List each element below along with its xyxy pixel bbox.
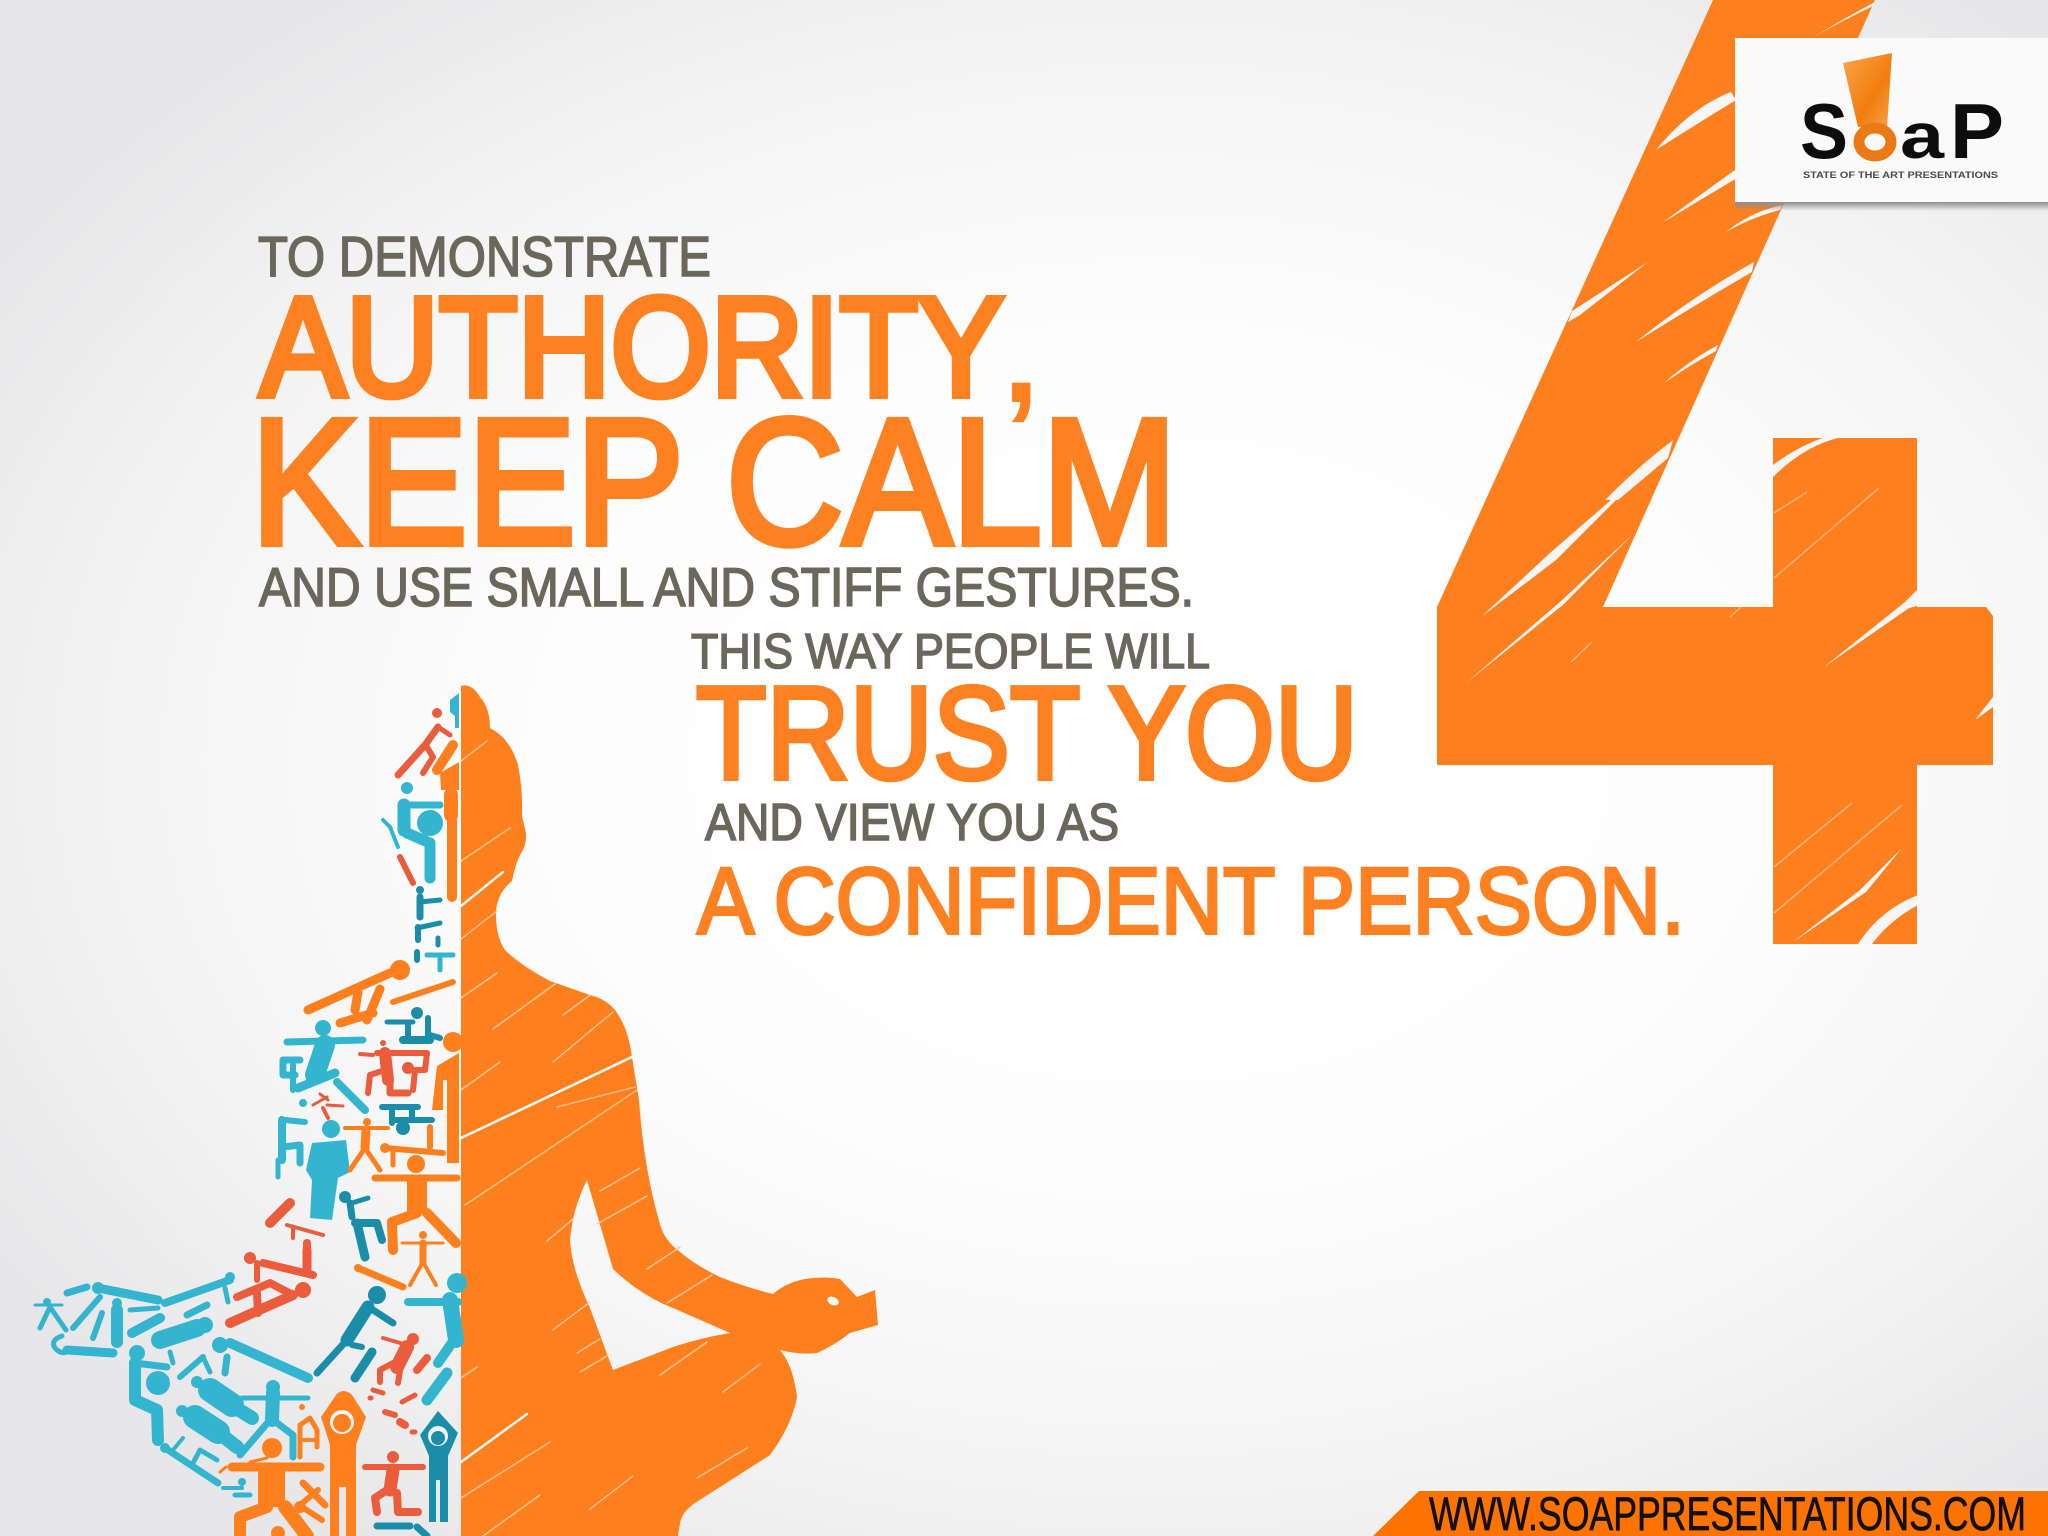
- text block: trust you: AND VIEW YOU AS: [705, 793, 1119, 851]
- red pictograms: [230, 708, 450, 1512]
- logo card: [1735, 38, 2048, 211]
- meditating figure: orange right half: [461, 685, 878, 1536]
- big numeral 4: [1437, 0, 1993, 944]
- heading text block: authority: [251, 225, 1194, 618]
- text block: trust you: THIS WAY PEOPLE WILL: [691, 625, 1210, 679]
- logo: wordmark: [1800, 87, 2004, 175]
- orange pictograms: [220, 745, 463, 1536]
- logo: wordmark: a: [1900, 100, 1945, 172]
- logo: exclamation mark: [1843, 53, 1892, 128]
- heading text block: authority: AUTHORITY: [260, 268, 1004, 426]
- heading text block: authority: KEEP CALM: [251, 382, 1177, 582]
- meditating figure: left half mosaic of exercise pictograms: [35, 693, 467, 1536]
- text block: trust you: TRUST YOU: [696, 660, 1358, 806]
- logo: tagline: STATE OF THE ART PRESENTATIONS: [1803, 170, 1998, 180]
- dark teal pictograms: [317, 886, 458, 1536]
- logo: wordmark: P: [1950, 87, 2004, 175]
- heading text block: authority: TO DEMONSTRATE: [258, 225, 711, 288]
- blue pictograms: [35, 693, 467, 1495]
- text block: trust you: [691, 625, 1685, 954]
- heading text block: authority: ,: [1003, 284, 1039, 430]
- logo: wordmark: S: [1800, 87, 1848, 175]
- text block: trust you: A CONFIDENT PERSON.: [697, 848, 1685, 954]
- heading text block: authority: AND USE SMALL AND STIFF GESTURES.: [259, 557, 1194, 618]
